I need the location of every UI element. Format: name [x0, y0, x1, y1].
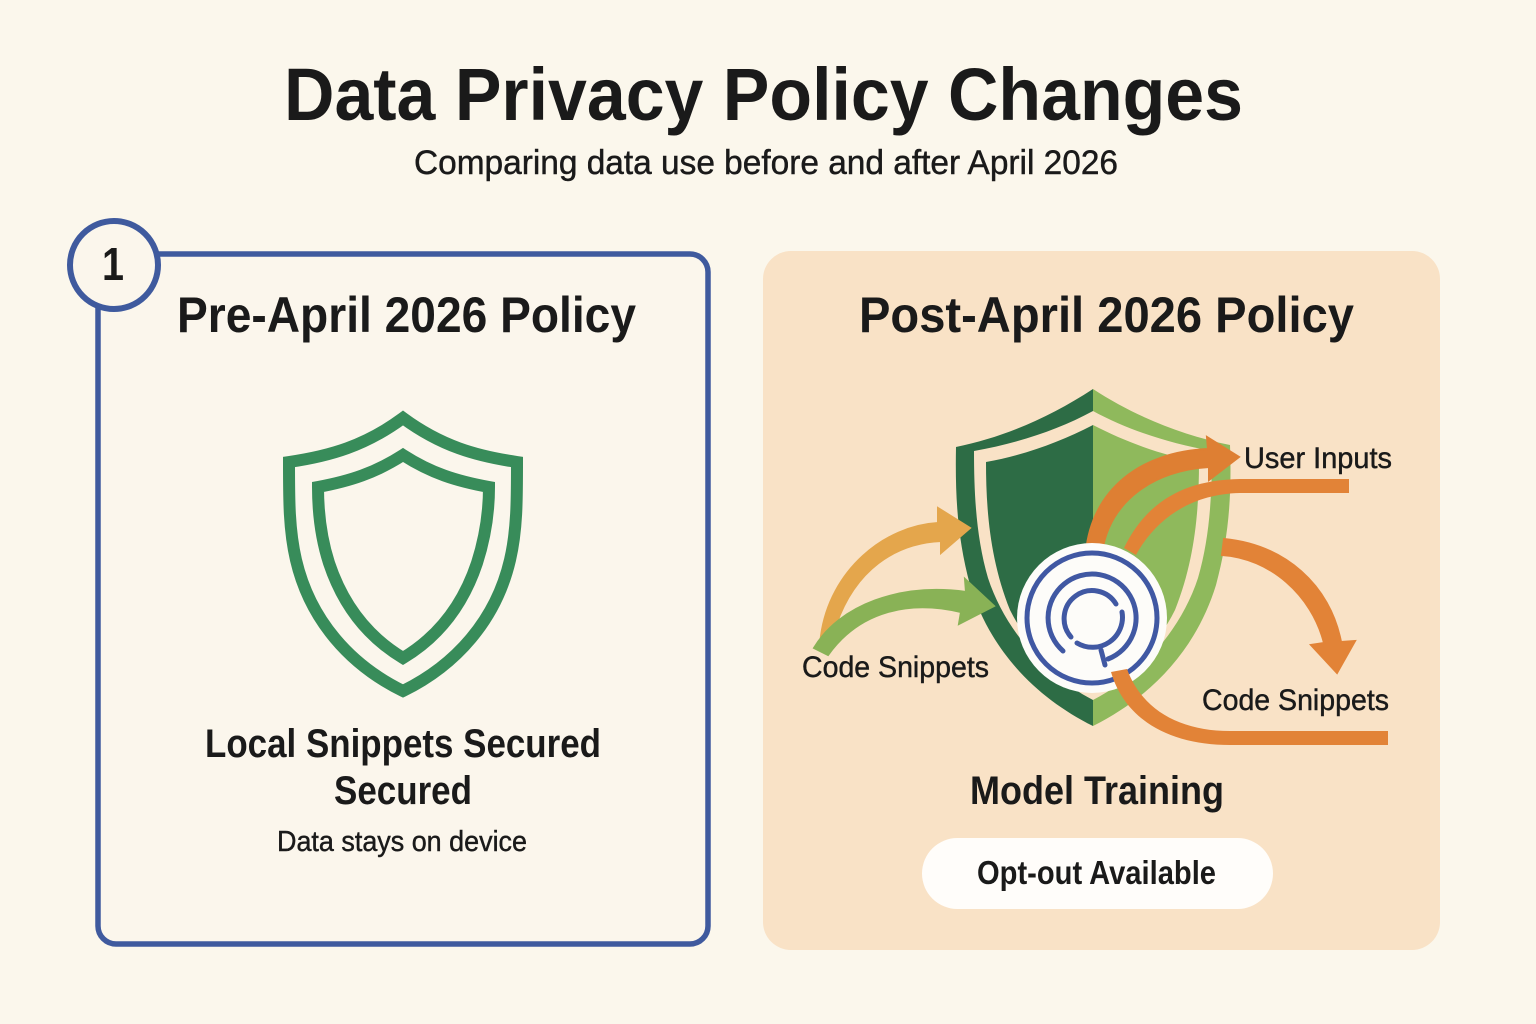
step badge	[70, 221, 158, 309]
label: code snippets left: Code Snippets	[802, 651, 989, 684]
arrow: orange lower output	[1111, 669, 1388, 745]
step badge: 1	[102, 238, 124, 290]
arrow: orange to user inputs	[1086, 437, 1239, 552]
arrow: green input arrow	[814, 579, 994, 655]
panel label: Secured	[334, 769, 472, 813]
label: code snippets right: Code Snippets	[1202, 684, 1389, 717]
panel: post-April 2026 policy	[763, 251, 1440, 950]
arrow: yellow input arrow	[821, 508, 970, 636]
icon: white circle with blue rings	[1017, 543, 1167, 693]
title: Data Privacy Policy Changes	[284, 53, 1243, 136]
panel label: Model Training	[970, 769, 1224, 813]
arrow: orange to code snippets	[1222, 539, 1355, 673]
icon: outlined shield	[289, 418, 517, 691]
panel label: Local Snippets Secured	[205, 722, 601, 766]
label: user inputs: User Inputs	[1244, 442, 1392, 475]
opt-out pill	[922, 838, 1273, 909]
panel label	[205, 722, 601, 813]
panel border	[98, 254, 708, 944]
panel heading: Post-April 2026 Policy	[859, 287, 1354, 343]
panel background	[763, 251, 1440, 950]
panel heading: Pre-April 2026 Policy	[177, 287, 636, 343]
opt-out pill: Opt-out Available	[977, 854, 1216, 891]
panel: pre-April 2026 policy	[70, 221, 708, 944]
arrow: orange from user inputs	[1124, 479, 1349, 555]
icon: two-tone shield	[956, 389, 1230, 726]
panel caption: Data stays on device	[277, 826, 527, 858]
subtitle: Comparing data use before and after April 2026	[414, 144, 1118, 182]
